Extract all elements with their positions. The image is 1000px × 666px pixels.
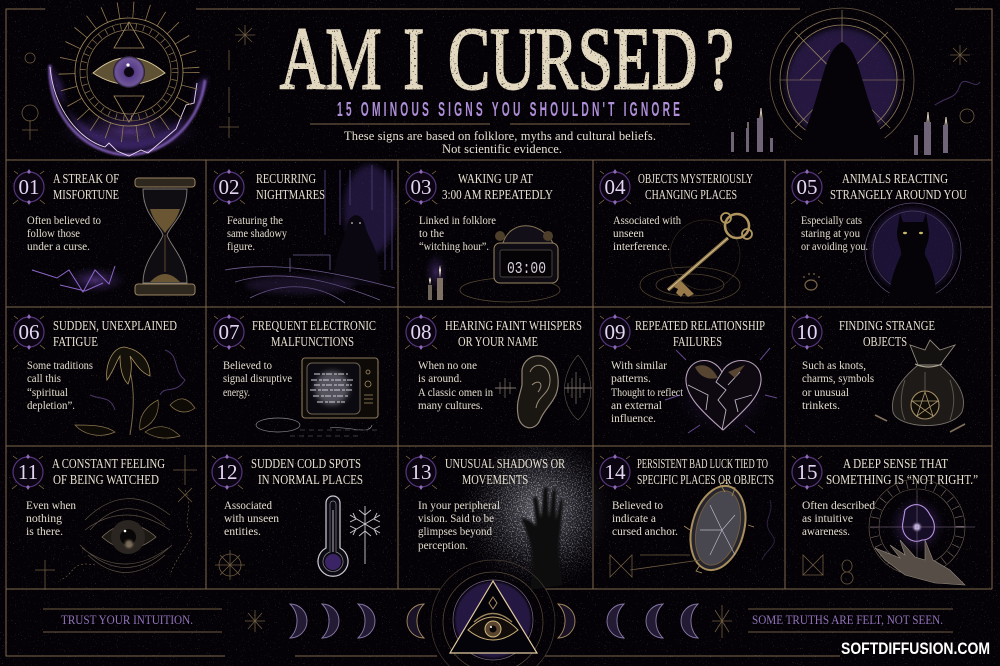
body 13: In your peripheral [418,498,501,512]
heading 11: OF BEING WATCHED [53,472,159,487]
card 10 [791,314,965,432]
title: AM [280,9,382,108]
card 04 [599,169,753,303]
moon phases right [558,604,698,638]
title: I [403,9,424,108]
card 15 [791,454,978,585]
heading 15 [826,456,978,487]
body 12: entities. [224,524,261,538]
heading 02 [256,171,325,202]
icon: hooded figure with rune circle and candles [731,8,980,157]
heading 06: SUDDEN, UNEXPLAINED [53,318,177,333]
heading 03 [442,171,553,202]
body 12: with unseen [224,511,279,525]
card 02 [213,165,396,303]
heading 07: FREQUENT ELECTRONIC [252,318,376,333]
card 09 [599,314,777,435]
body 08: is around. [418,371,462,385]
body 10: trinkets. [802,398,840,412]
body 14: Believed to [612,498,663,512]
heading 07: MALFUNCTIONS [271,334,354,349]
heading 02: NIGHTMARES [256,187,325,202]
body 05: Especially cats [801,213,862,227]
heading 13: MOVEMENTS [462,472,528,487]
icon: hourglass with purple lightning [32,178,195,295]
heading 09: REPEATED RELATIONSHIP [635,318,765,333]
footer band [43,560,990,666]
card 05 [791,169,967,302]
badge 11 [12,454,44,490]
icon: shadow hand [521,487,563,590]
body 06: Some traditions [27,358,93,372]
body 03: Linked in folklore [419,213,496,227]
badge 07 [213,314,245,350]
subtitle: 15 OMINOUS SIGNS YOU SHOULDN'T IGNORE [337,98,680,121]
badge 15 [791,454,823,490]
icon: purple energy above open hand [803,479,975,585]
badge 05: 05 [796,175,818,199]
heading 12 [251,456,363,487]
disclaimer [344,129,656,156]
body 01: Often believed to [27,213,101,227]
icon: digital alarm clock and candles: 03:00 [507,260,546,279]
badge 06 [13,314,45,350]
card 01 [13,169,195,295]
icon: ornate cracked mirror [610,480,774,577]
heading 11: A CONSTANT FEELING [52,456,165,471]
footer message left [43,609,222,632]
body 08: many cultures. [418,398,483,412]
badge 09: 09 [604,320,626,344]
heading 03: WAKING UP AT [458,171,534,186]
badge 12 [211,454,243,490]
body 12: Associated [224,498,272,512]
icon: ornate key [640,213,752,303]
card 12 [211,454,380,580]
card 06 [13,314,195,438]
body 02 [227,213,287,253]
icon: black cat in rune circle [804,203,961,302]
body 11: nothing [26,511,62,525]
badge 07: 07 [218,320,240,344]
heading 12: SUDDEN COLD SPOTS [251,456,361,471]
icon: digital alarm clock and candles [424,226,560,302]
heading 14: SPECIFIC PLACES OR OBJECTS [637,472,774,487]
heading 09 [635,318,765,349]
body 11 [26,498,76,538]
body 13: glimpses beyond [418,524,492,538]
badge 02: 02 [218,175,240,199]
heading 05 [830,171,967,202]
badge 10 [791,314,823,350]
body 08: When no one [418,358,477,372]
heading 10: FINDING STRANGE [839,318,935,333]
badge 13 [405,454,437,490]
disclaimer: Not scientific evidence. [442,142,562,156]
body 04 [613,213,681,253]
body 08: A classic omen in [418,385,493,399]
body 07 [223,358,292,399]
heading 13 [445,456,565,487]
body 04: unseen [613,226,644,240]
icon: wilted plant [75,347,195,438]
body 14 [612,498,678,538]
card 14 [599,454,774,577]
body 05 [801,213,868,253]
heading 01 [53,171,119,202]
body 13 [418,498,501,552]
body 06: depletion”. [27,398,75,412]
body 02: same shadowy [227,226,287,240]
heading 15: A DEEP SENSE THAT [843,456,949,471]
shadow background glow [460,446,599,584]
badge 11: 11 [18,460,38,484]
badge 14 [599,454,631,490]
footer message right: SOME TRUTHS ARE FELT, NOT SEEN. [752,613,943,627]
heading 14: PERSISTENT BAD LUCK TIED TO [637,456,768,471]
heading 01: MISFORTUNE [53,187,119,202]
card 11 [12,454,197,590]
badge 13: 13 [410,460,432,484]
heading 04: CHANGING PLACES [645,187,737,202]
heading 01: A STREAK OF [53,171,119,186]
card 07 [213,314,380,436]
body 09: With similar [611,358,667,372]
icon: static television [256,358,380,436]
body 07: signal disruptive [223,371,292,385]
heading 05: STRANGELY AROUND YOU [830,187,967,202]
body 05: staring at you [801,226,860,240]
body 01: follow those [27,226,80,240]
moon phases left [290,604,424,638]
body 01: under a curse. [27,239,90,253]
title: CURSED [448,9,697,108]
icon: cracked heart [665,348,777,435]
body 13: vision. Said to be [418,511,494,525]
body 13: perception. [418,538,468,552]
heading 10 [839,318,935,349]
body 14: indicate a [612,511,657,525]
card 08 [405,314,592,428]
card 13 [404,446,599,590]
title: ? [706,9,734,108]
heading 08 [445,318,582,349]
body 12 [224,498,279,538]
body 15: as intuitive [802,511,853,525]
body 07: Believed to [223,358,272,372]
body 11: is there. [26,524,63,538]
body 01 [27,213,101,253]
heading 09: FAILURES [673,334,722,349]
heading 04: OBJECTS MYSTERIOUSLY [638,171,753,186]
icon: watching eye [35,455,197,590]
heading 13: UNUSUAL SHADOWS OR [445,456,565,471]
heading 03: 3:00 AM REPEATEDLY [442,187,553,202]
body 09: influence. [611,411,656,425]
body 03: to the [419,226,444,240]
body 14: cursed anchor. [612,524,678,538]
body 03: “witching hour”. [419,239,489,253]
body 04: Associated with [613,213,681,227]
heading 02: RECURRING [256,171,316,186]
body 06 [27,358,93,412]
body 04: interference. [613,239,670,253]
icon: shadow figure by the bed [225,165,396,303]
badge 02 [213,169,245,205]
body 15 [802,498,875,538]
body 02: figure. [227,239,255,253]
title [280,9,734,108]
heading 11 [52,456,165,487]
badge 10: 10 [796,320,818,344]
body 09: Thought to reflect [611,385,684,399]
body 08 [418,358,493,412]
body 06: call this [27,371,61,385]
body 09: patterns. [611,371,651,385]
heading 14 [637,456,774,487]
footer message right [748,609,953,632]
icon: all-seeing eye emblem with purple crescent [22,10,255,156]
card 03 [405,169,560,302]
badge 08: 08 [410,320,432,344]
heading 04 [638,171,753,202]
heading 08: HEARING FAINT WHISPERS [445,318,582,333]
body 11: Even when [26,498,76,512]
star ornaments [245,605,732,638]
badge 04: 04 [604,175,626,199]
body 09 [611,358,684,425]
body 07: energy. [223,385,250,399]
badge 12: 12 [216,460,238,484]
heading 06 [53,318,177,349]
icon: charm bag with pentagram [875,340,965,432]
disclaimer: These signs are based on folklore, myths and cultural beliefs. [344,129,656,143]
body 06: “spiritual [27,385,69,399]
badge 06: 06 [18,320,40,344]
body 09: an external [611,398,663,412]
body 10: Such as knots, [802,358,866,372]
heading 08: OR YOUR NAME [458,334,538,349]
badge 05 [791,169,823,205]
heading 07 [252,318,376,349]
badge 09 [599,314,631,350]
heading 10: OBJECTS [863,334,907,349]
footer message left: TRUST YOUR INTUITION. [61,613,193,627]
heading 06: FATIGUE [53,334,98,349]
badge 01 [13,169,45,205]
body 10: or unusual [802,385,850,399]
icon: thermometer and snowflake [215,496,380,580]
badge 03: 03 [410,175,432,199]
body 02: Featuring the [227,213,283,227]
badge 04 [599,169,631,205]
badge 08 [405,314,437,350]
badge 03 [405,169,437,205]
badge 15: 15 [796,460,818,484]
heading 12: IN NORMAL PLACES [258,472,363,487]
icon: ear and sound waves [495,355,592,428]
body 15: awareness. [802,524,850,538]
badge 14: 14 [604,460,626,484]
badge 01: 01 [18,175,40,199]
body 15: Often described [802,498,875,512]
body 10 [802,358,874,412]
body 05: or avoiding you. [801,239,868,253]
icon: eye in triangle [431,560,555,666]
body 03 [419,213,496,253]
body 10: charms, symbols [802,371,874,385]
heading 05: ANIMALS REACTING [842,171,948,186]
